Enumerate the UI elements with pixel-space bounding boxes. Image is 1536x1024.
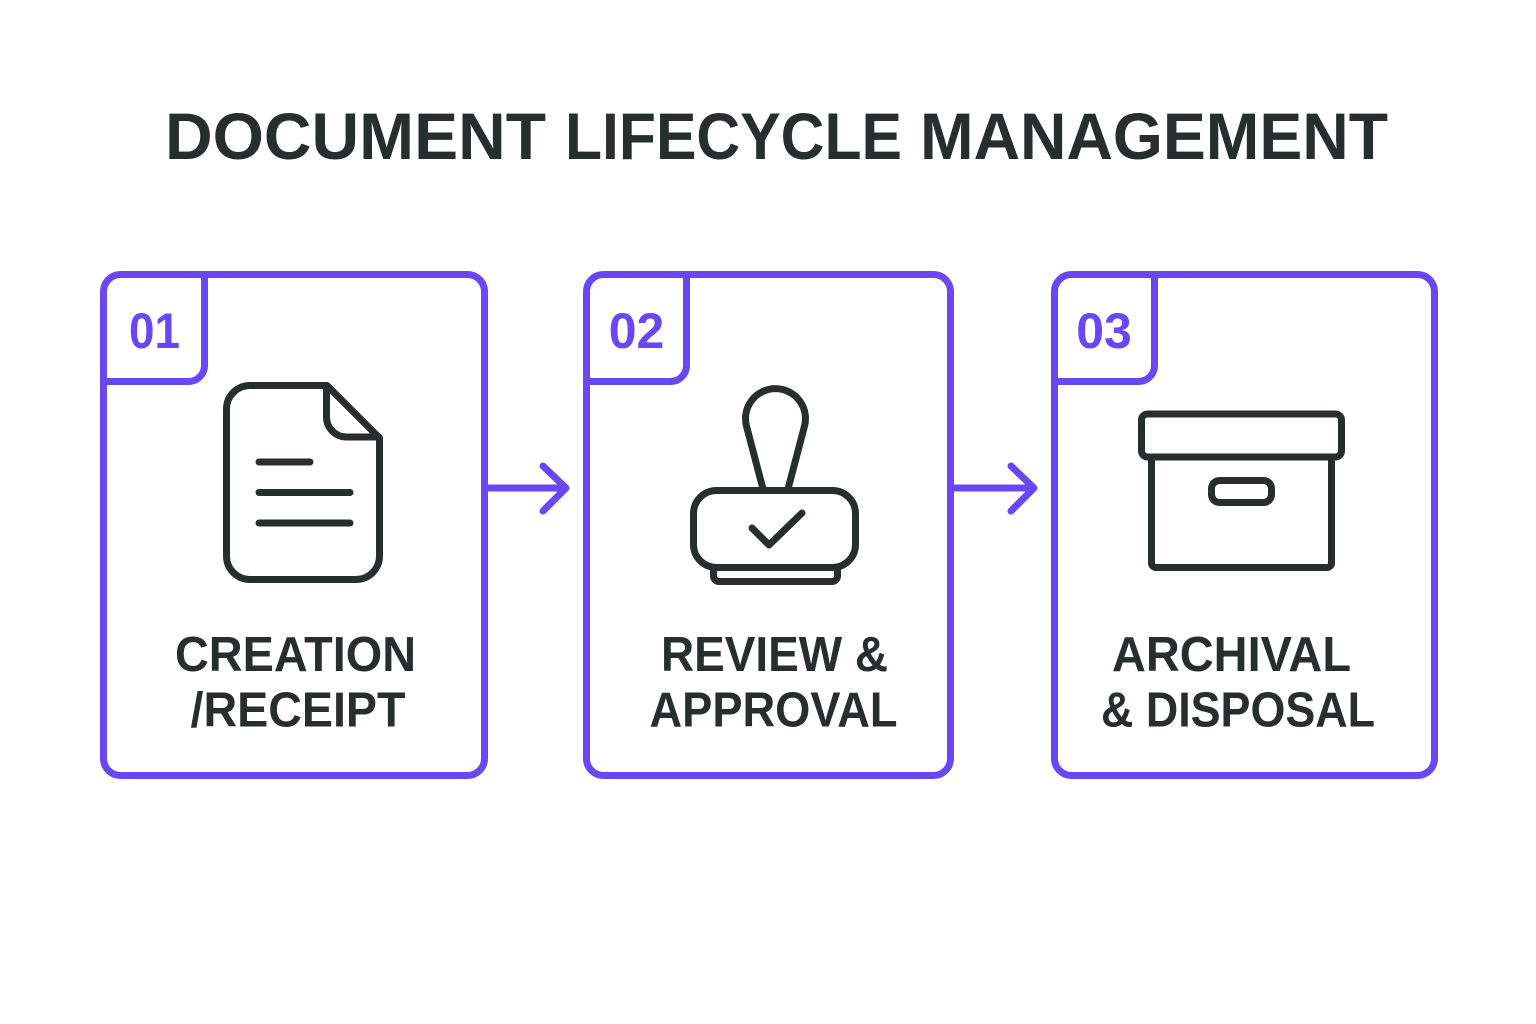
panel: step 2 review	[586, 274, 950, 776]
label: review and approval	[650, 628, 898, 738]
number badge 03: 03	[1076, 303, 1132, 359]
panel: step 3 archival	[1054, 274, 1434, 776]
title: DOCUMENT	[165, 99, 546, 173]
title: MANAGEMENT	[920, 99, 1388, 173]
label: creation receipt: /RECEIPT	[190, 684, 406, 738]
number badge 03	[1056, 276, 1154, 382]
arrow: step 1 to 2	[487, 466, 566, 511]
title: LIFECYCLE	[565, 99, 902, 173]
icon: approval stamp	[694, 389, 856, 582]
number badge 02	[588, 276, 686, 382]
number badge 01: 01	[129, 303, 180, 359]
arrow: step 2 to 3	[954, 466, 1034, 511]
label: review and approval: REVIEW &	[661, 628, 888, 682]
number badge 01	[105, 276, 204, 382]
label: creation receipt: CREATION	[175, 628, 416, 682]
label: archival and disposal: ARCHIVAL	[1112, 628, 1351, 682]
number badge 02: 02	[609, 303, 664, 359]
icon: archive box	[1142, 414, 1342, 568]
label: review and approval: APPROVAL	[650, 684, 898, 738]
icon: document	[226, 386, 380, 580]
label: creation receipt	[175, 628, 416, 738]
label: archival and disposal: & DISPOSAL	[1101, 684, 1375, 738]
panel: step 1 creation	[104, 274, 484, 776]
label: archival and disposal	[1101, 628, 1375, 738]
